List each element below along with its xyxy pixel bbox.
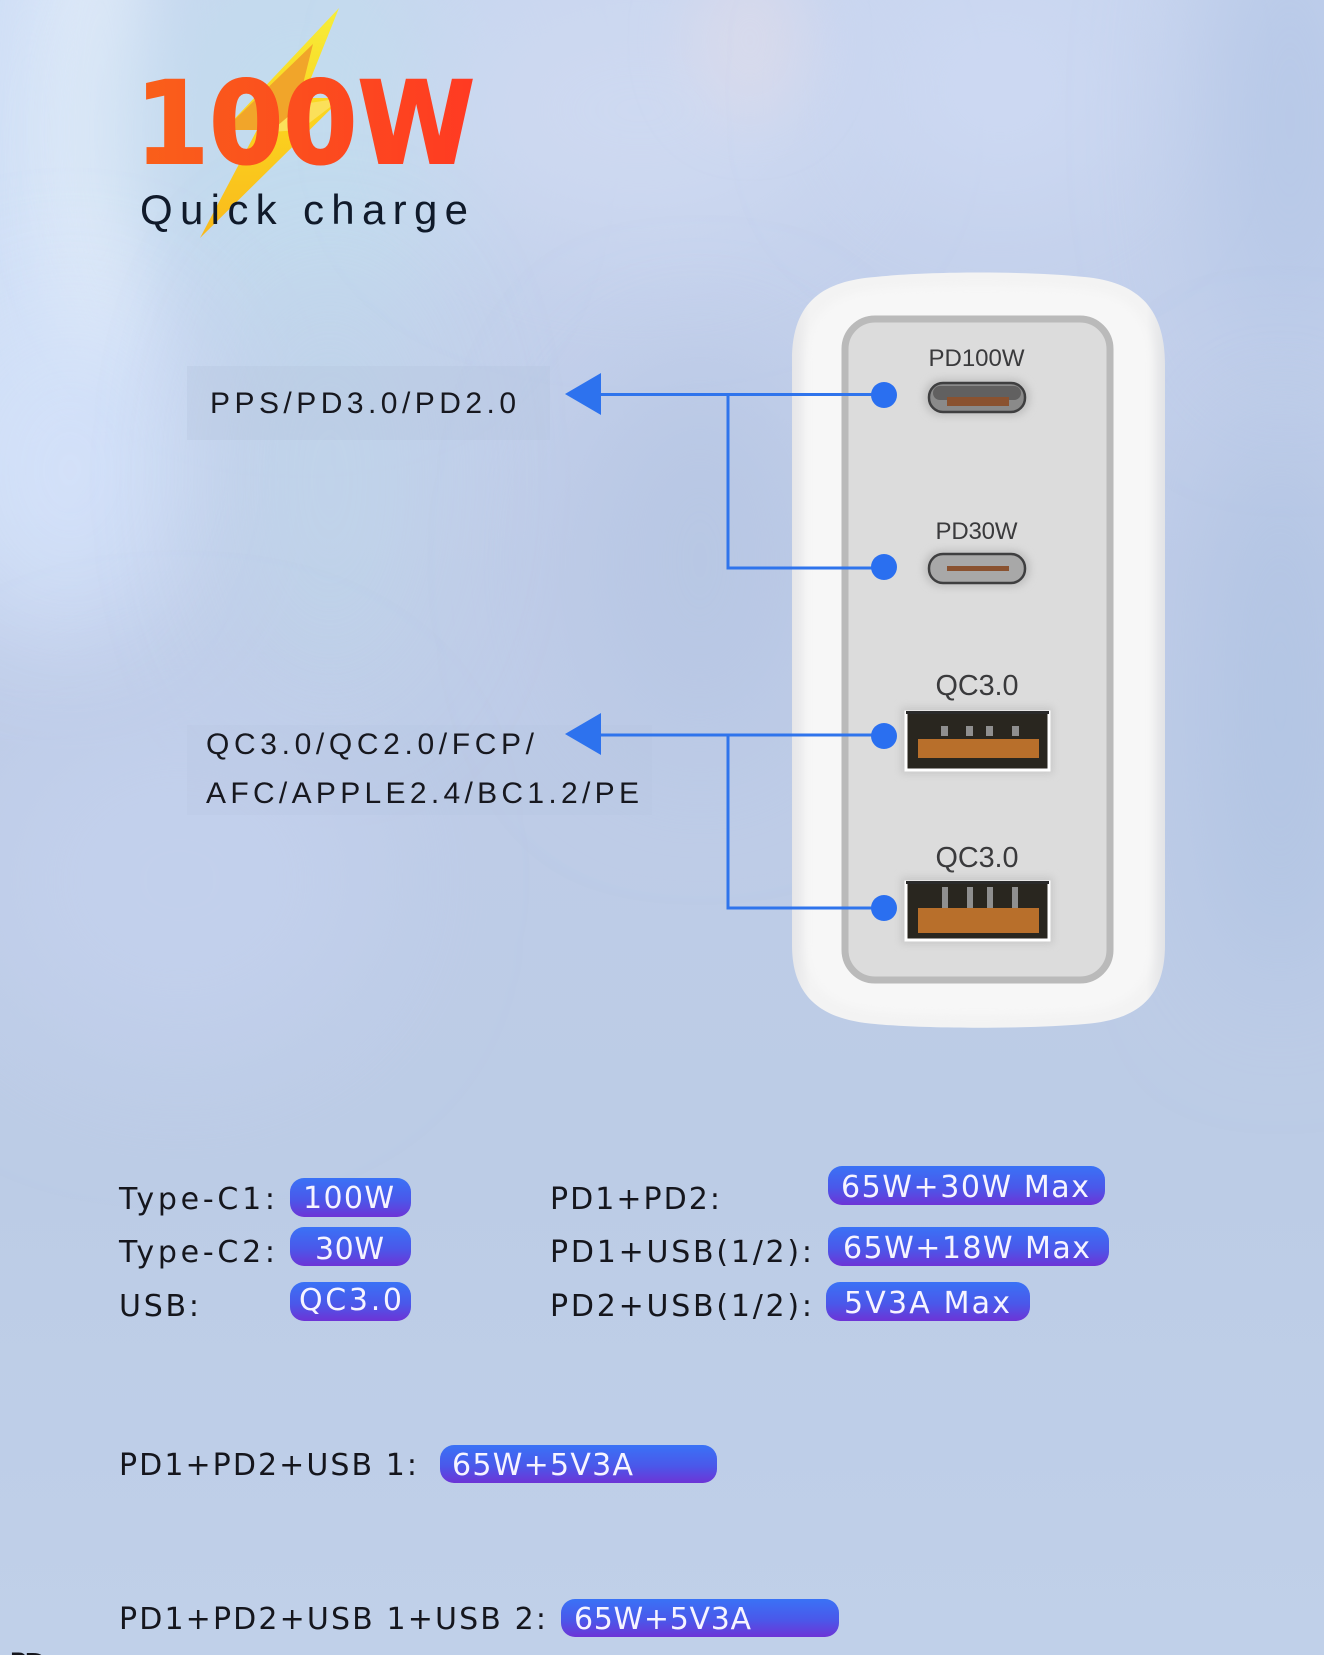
spec: Type-C2: 30W bbox=[315, 1232, 384, 1267]
port: USB QC3.0 upper: QC3.0 bbox=[936, 670, 1018, 702]
spec: Type-C1 bbox=[118, 1178, 411, 1217]
spec: PD2+USB(1/2): PD2+USB(1/2): bbox=[550, 1289, 812, 1324]
spec: PD1+PD2: 65W+30W Max bbox=[841, 1170, 1089, 1205]
port: USB QC3.0 lower: QC3.0 bbox=[936, 842, 1018, 874]
title: 100W: 100W bbox=[135, 57, 475, 190]
label: QC3.0 protocols: AFC/APPLE2.4/BC1.2/PE bbox=[206, 777, 639, 810]
port: PD30W: PD30W bbox=[936, 518, 1018, 545]
spec: PD1+USB(1/2): 65W+18W Max bbox=[843, 1231, 1090, 1266]
spec: PD1+PD2: PD1+PD2: bbox=[550, 1182, 720, 1217]
inner panel bbox=[845, 319, 1110, 980]
spec: PD1+PD2 bbox=[550, 1166, 1105, 1217]
spec: PD1+PD2+USB 1: PD1+PD2+USB 1: bbox=[119, 1448, 417, 1483]
spec: PD1+USB(1/2) bbox=[550, 1227, 1109, 1270]
spec: Type-C1: Type-C1: bbox=[118, 1182, 275, 1217]
subtitle: Quick charge: Quick charge bbox=[140, 186, 468, 233]
port: PD100W: PD100W bbox=[928, 345, 1025, 372]
spec: PD1+PD2+USB 1+USB 2: 65W+5V3A bbox=[574, 1602, 751, 1637]
label: PPS/PD3.0/PD2.0 bbox=[187, 366, 550, 440]
spec: PD1+USB(1/2): PD1+USB(1/2): bbox=[550, 1235, 812, 1270]
spec: Type-C2: Type-C2: bbox=[118, 1235, 275, 1270]
port: USB QC3.0 upper bbox=[901, 670, 1053, 774]
icon: lightning bolt bbox=[200, 8, 342, 238]
label: PPS/PD3.0/PD2.0: PPS/PD3.0/PD2.0 bbox=[210, 387, 516, 420]
spec: USB: QC3.0 bbox=[299, 1283, 402, 1318]
connector: upper pair with arrow bbox=[565, 373, 897, 580]
spec: PD2+USB(1/2): 5V3A Max bbox=[844, 1286, 1010, 1321]
port: PD100W bbox=[924, 345, 1030, 416]
charger body bbox=[792, 272, 1165, 1028]
spec: Type-C1: 100W bbox=[303, 1181, 394, 1216]
spec: PD1+PD2+USB 1+USB 2: PD1+PD2+USB 1+USB 2: bbox=[119, 1602, 546, 1637]
label: QC3.0 protocols: QC3.0/QC2.0/FCP/ bbox=[206, 728, 535, 761]
spec: Type-C2 bbox=[118, 1227, 411, 1270]
label: QC3.0 protocols bbox=[187, 725, 652, 815]
spec: USB: USB: bbox=[119, 1289, 199, 1324]
connector: lower pair with arrow bbox=[565, 713, 897, 921]
spec: PD1+PD2+USB 1: 65W+5V3A bbox=[452, 1448, 633, 1483]
spec: PD2+USB(1/2) bbox=[550, 1282, 1030, 1324]
spec: PD1+PD2+USB 1 bbox=[119, 1445, 717, 1483]
port: PD30W bbox=[924, 518, 1030, 587]
port: USB QC3.0 lower bbox=[901, 842, 1053, 944]
spec: PD1+PD2+USB 1+USB 2 bbox=[119, 1599, 839, 1637]
spec: USB bbox=[119, 1282, 411, 1324]
